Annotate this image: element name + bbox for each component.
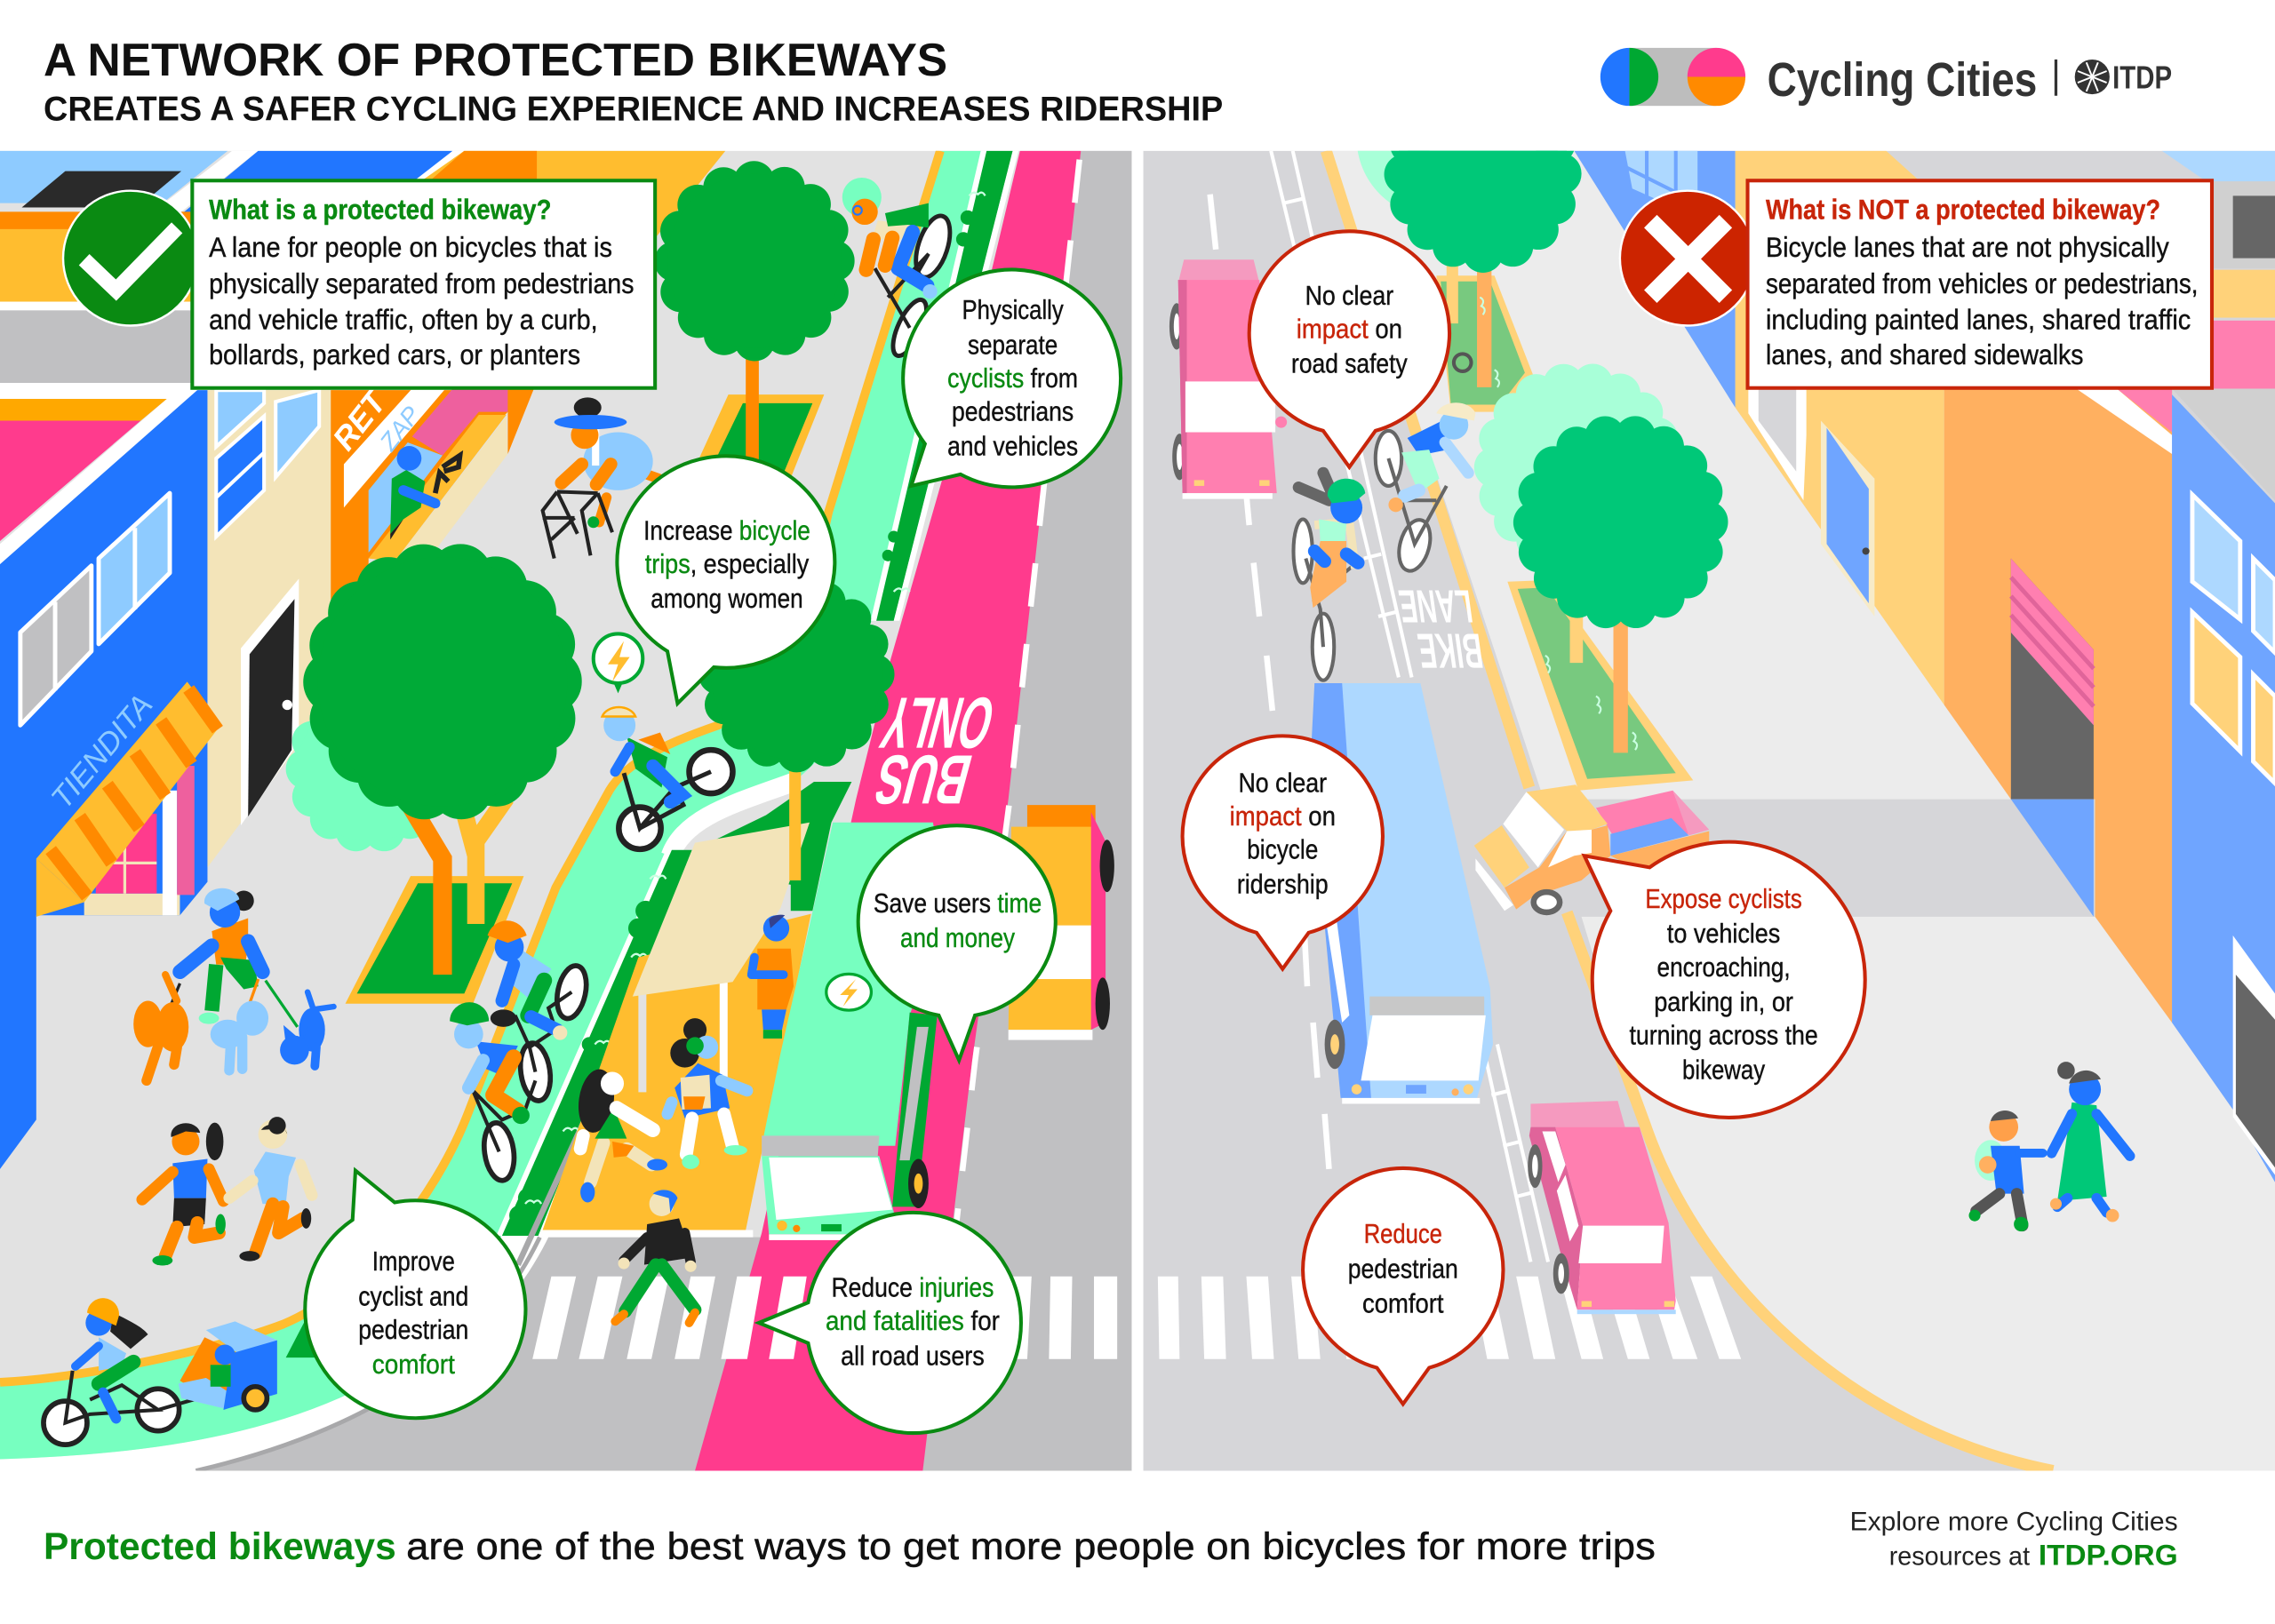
person: two cyclists in lane <box>450 920 591 1182</box>
callout: reduce pedestrian comfort: Reduce <box>1364 1220 1442 1249</box>
BUS ONLY road text: BUS <box>866 741 979 818</box>
definition box: what is not a protected bikeway: What is NOT a protected bikeway? <box>1766 194 2160 226</box>
callout: improve comfort: pedestrian <box>358 1316 468 1345</box>
person: older woman with walker <box>543 397 659 559</box>
callout: physically separate: cyclists from <box>947 364 1078 394</box>
lane markings <box>1210 151 1548 1262</box>
callout: reduce injuries <box>759 1213 1021 1433</box>
callout: expose cyclists: turning across the <box>1629 1022 1818 1051</box>
logo: Cycling Cities and ITDP: ITDP <box>2112 60 2172 96</box>
shop signs <box>44 382 426 816</box>
person: cyclist at top of lane <box>842 178 956 361</box>
BIKE LANE road text <box>1396 580 1486 678</box>
footer link: Explore more Cycling Cities <box>1850 1507 2178 1536</box>
definition box: what is not a protected bikeway: separated from vehicles or pedestrians, <box>1766 267 2198 299</box>
panel: protected bikeway street scene <box>0 151 1131 1471</box>
callout: increase bicycle trips: Increase bicycle <box>643 516 810 545</box>
planter and tree 2 <box>298 557 567 1004</box>
callout: reduce pedestrian comfort: comfort <box>1362 1290 1444 1319</box>
callout: physically separate: pedestrians <box>952 397 1074 426</box>
callout: improve comfort: comfort <box>372 1350 455 1380</box>
vehicle: pink car bottom <box>1528 1101 1676 1314</box>
callout: expose cyclists: parking in, or <box>1654 988 1793 1017</box>
bus stop platform <box>543 914 811 1230</box>
logo: Cycling Cities and ITDP: Cycling Cities <box>1768 53 2037 107</box>
callout: physically separate: Physically <box>962 296 1064 325</box>
planter strips <box>286 151 1018 1357</box>
callout: reduce injuries: Reduce injuries <box>832 1274 994 1303</box>
callout: reduce pedestrian comfort <box>1303 1168 1503 1404</box>
footer link: ITDP.ORG <box>2039 1539 2178 1572</box>
callout: no clear impact on ridership: bicycle <box>1247 836 1318 865</box>
shop signs: TIENDITA <box>44 689 159 816</box>
title: A NETWORK OF PROTECTED BIKEWAYS <box>44 35 947 86</box>
planter and trees middle <box>1480 298 1716 791</box>
BIKE LANE road text: LANE <box>1396 580 1475 632</box>
callout: physically separate <box>903 269 1121 487</box>
vehicle: light blue bus <box>1310 683 1493 1103</box>
crosswalk right <box>1158 1277 1741 1359</box>
vehicle: pickup truck <box>1474 784 1709 912</box>
person: woman cycling with child trailer <box>44 1298 277 1445</box>
definition box: what is a protected bikeway: physically separated from pedestrians <box>209 267 634 299</box>
callout: improve comfort: Improve <box>372 1247 455 1277</box>
callout: expose cyclists: to vehicles <box>1667 919 1780 949</box>
person: pedestrian crossing <box>615 1190 697 1323</box>
callout: physically separate: and vehicles <box>947 433 1078 462</box>
BUS ONLY road text <box>876 697 992 805</box>
callout: reduce injuries: and fatalities for <box>826 1307 1000 1336</box>
definition box: what is a protected bikeway: and vehicle traffic, often by a curb, <box>209 304 598 336</box>
definition box: what is a protected bikeway: What is a protected bikeway? <box>209 194 551 226</box>
person: mother and child walking <box>1969 1062 2130 1231</box>
callout: improve comfort: cyclist and <box>358 1282 468 1311</box>
callout: no clear impact on ridership: impact on <box>1230 802 1336 832</box>
callout: expose cyclists: bikeway <box>1682 1056 1766 1086</box>
footer link: resources at <box>1889 1542 2030 1572</box>
person: cyclist with lightning badge <box>603 707 732 849</box>
shop awning and storefront <box>36 681 220 917</box>
callout: increase bicycle trips: among women <box>651 585 803 614</box>
planter and tree 1 <box>667 174 842 496</box>
callout: improve comfort <box>305 1171 525 1418</box>
icon: lightning badge <box>594 633 643 693</box>
bus lane <box>695 151 1081 1471</box>
icon: check mark <box>63 191 198 326</box>
icon: cross mark <box>1620 191 1755 326</box>
callout: expose cyclists: encroaching, <box>1656 953 1791 983</box>
person: cyclist green helmet <box>1294 473 1365 681</box>
buildings: right side of street <box>1574 151 2275 1182</box>
curb line <box>1326 151 2053 1471</box>
callout: no clear impact on ridership: ridership <box>1237 871 1329 900</box>
callout: increase bicycle trips <box>617 456 834 704</box>
vehicle: pink car top <box>1169 259 1287 499</box>
callout: no clear impact on road safety: road safety <box>1291 350 1408 379</box>
callout: no clear impact on road safety <box>1249 231 1449 467</box>
definition box: what is not a protected bikeway: lanes, and shared sidewalks <box>1766 338 2083 370</box>
tree 3 <box>711 589 882 880</box>
logo: Cycling Cities and ITDP <box>1600 48 2172 107</box>
callout: reduce injuries: all road users <box>841 1341 985 1371</box>
bus stop canopy <box>633 823 810 1092</box>
footer link <box>1850 1507 2178 1572</box>
callout: no clear impact on road safety: impact on <box>1297 314 1402 344</box>
crosswalk left <box>532 1277 1117 1359</box>
footer statement: Protected bikeways <box>44 1525 396 1567</box>
definition box: what is not a protected bikeway <box>1748 180 2212 388</box>
callout: reduce pedestrian comfort: pedestrian <box>1348 1254 1458 1284</box>
footer statement: are one of the best ways to get more people on bicycles for more trips <box>406 1525 1656 1567</box>
planter and tree top <box>1357 58 1570 412</box>
callout: no clear impact on road safety: No clear <box>1305 282 1393 311</box>
shop signs: ZAP <box>374 401 426 457</box>
callout: no clear impact on ridership <box>1183 736 1383 969</box>
callout: save users time and money: Save users time <box>874 889 1042 919</box>
callout: physically separate: separate <box>968 330 1058 360</box>
person: waiting passenger <box>752 915 794 1039</box>
definition box: what is not a protected bikeway: including painted lanes, shared traffic <box>1766 304 2191 336</box>
person: two pedestrians at bus stop <box>575 1018 747 1202</box>
callout: expose cyclists <box>1585 842 1865 1118</box>
subtitle: CREATES A SAFER CYCLING EXPERIENCE AND INCREASES RIDERSHIP <box>44 91 1223 129</box>
definition box: what is a protected bikeway: A lane for people on bicycles that is <box>209 231 612 263</box>
person: shopkeeper in doorway <box>390 446 460 539</box>
definition box: what is a protected bikeway <box>192 180 655 388</box>
definition box: what is a protected bikeway: bollards, parked cars, or planters <box>209 338 580 370</box>
person: cyclist light blue <box>1376 402 1475 574</box>
BIKE LANE road text: BIKE <box>1415 624 1486 678</box>
truck <box>1009 805 1114 1040</box>
person: couple running <box>142 1117 312 1265</box>
icon: electric bus badge <box>826 974 871 1010</box>
definition box: what is not a protected bikeway: Bicycle lanes that are not physically <box>1766 231 2169 263</box>
electric bus <box>762 823 947 1240</box>
callout: no clear impact on ridership: No clear <box>1238 768 1327 798</box>
callout: save users time and money: and money <box>900 924 1016 953</box>
callout: increase bicycle trips: trips, especially <box>645 550 810 579</box>
road <box>196 151 1131 1471</box>
BUS ONLY road text: ONLY <box>874 682 1002 763</box>
buildings: left side of street <box>0 151 725 1169</box>
callout: expose cyclists: Expose cyclists <box>1645 885 1802 914</box>
callout: save users time and money <box>858 825 1056 1060</box>
protected bike lane <box>0 151 981 1471</box>
bus lane dashes <box>950 160 1080 1277</box>
sidewalks <box>1329 151 2275 1471</box>
panel: not protected street scene <box>1144 58 2275 1471</box>
person: dog walker with three dogs <box>133 888 334 1080</box>
shop signs: RET <box>325 382 395 457</box>
